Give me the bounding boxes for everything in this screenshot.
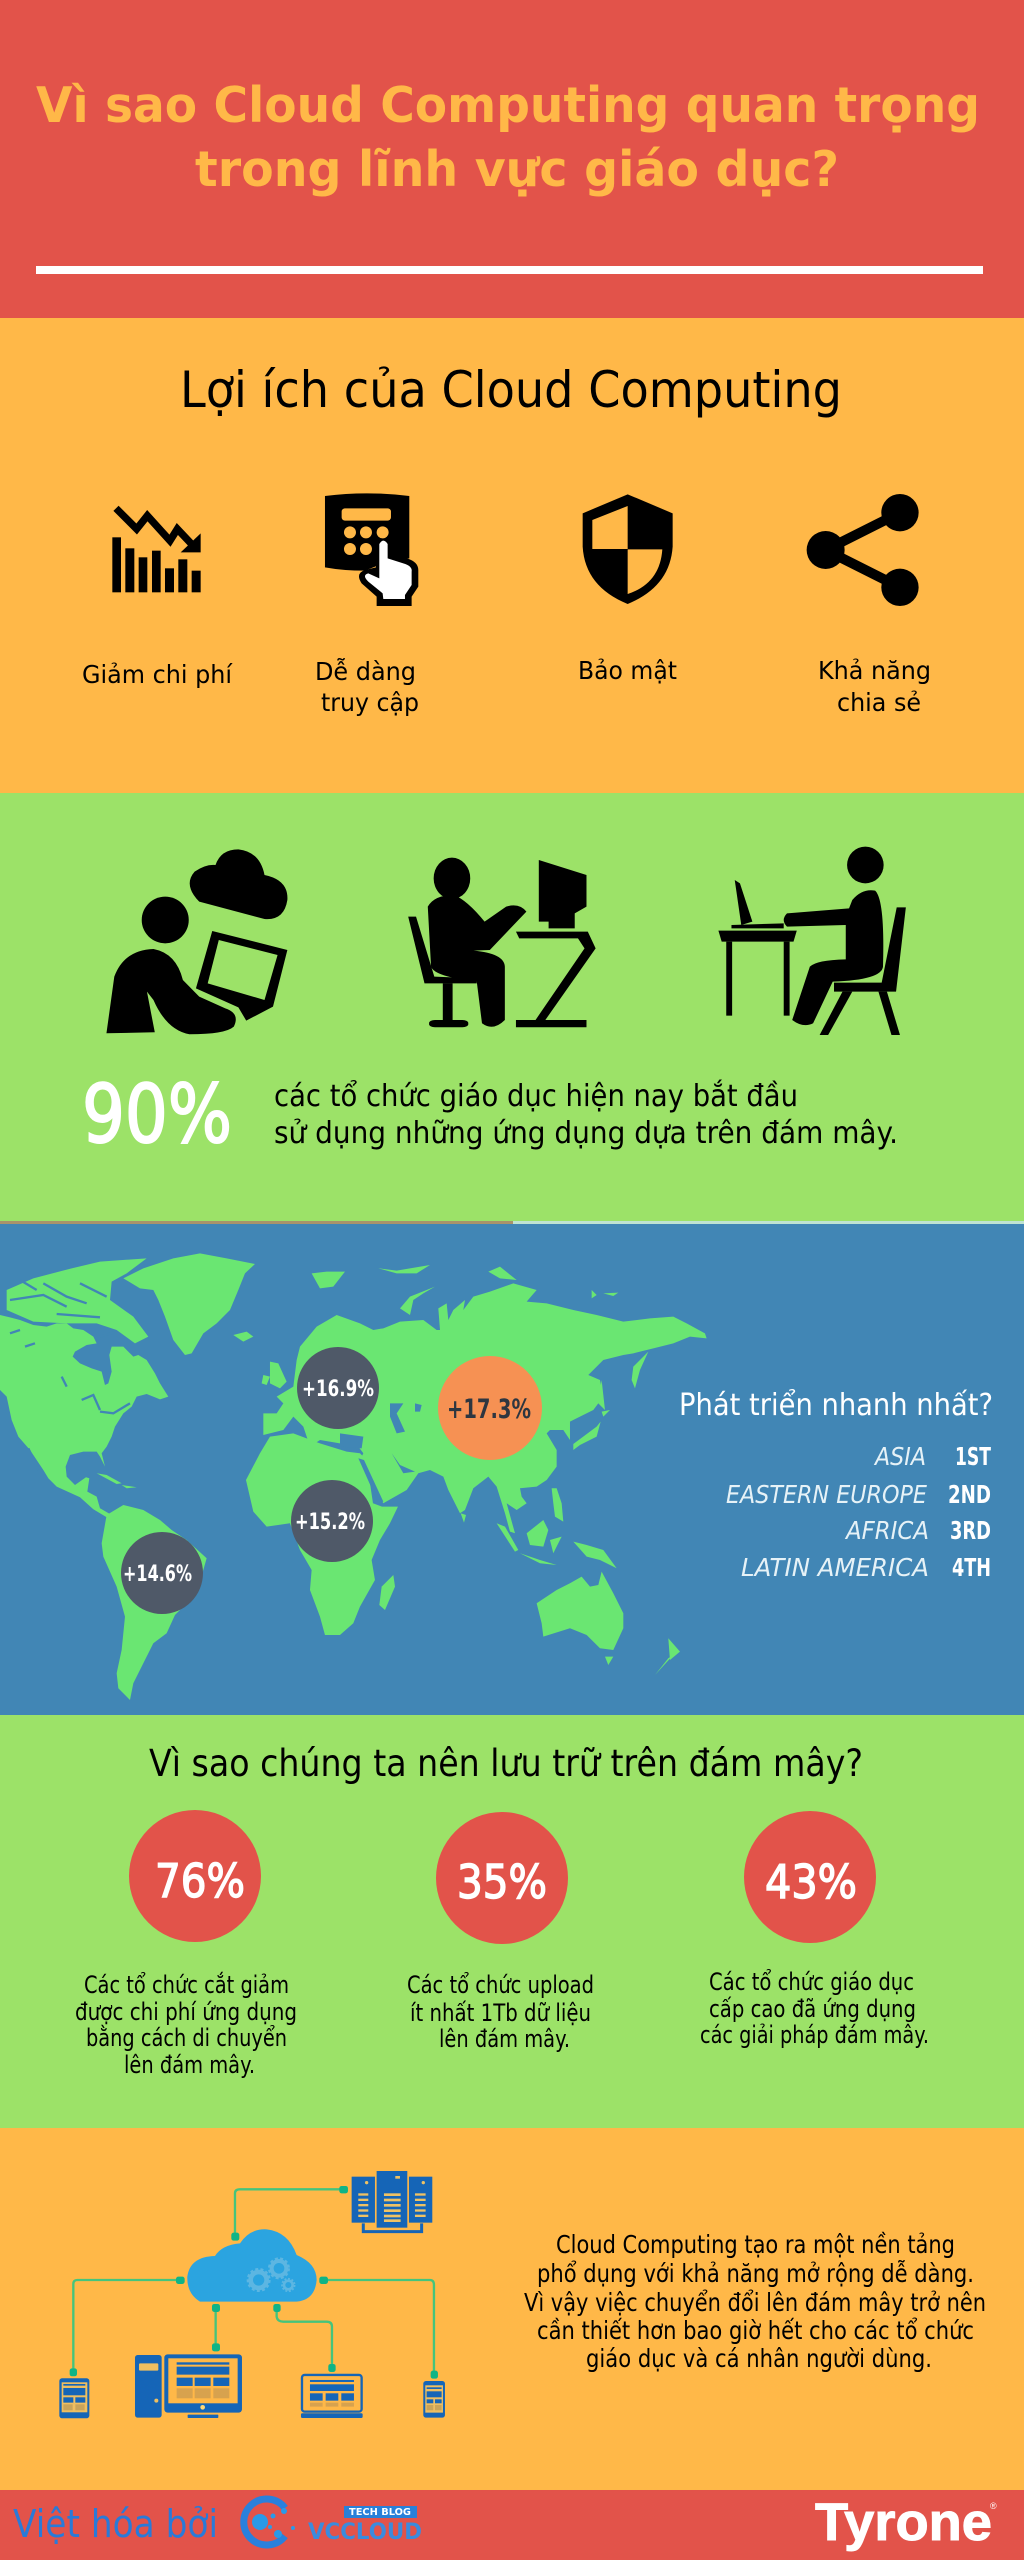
icon: share — [807, 494, 919, 606]
credit text: Việt hóa bởi — [13, 2502, 218, 2546]
stat: 76% — [129, 1810, 261, 1942]
ranking list: ASIA — [873, 1442, 926, 1471]
icon: cloud with gears — [187, 2229, 317, 2302]
icon: person with cloud and laptop — [106, 849, 287, 1034]
text: 43% description: Các tổ chức giáo dục — [709, 1968, 914, 1996]
label: access — [315, 657, 419, 717]
text: cloud platform description: giáo dục và cá nhân người dùng. — [586, 2344, 932, 2373]
logo: Tyrone: ® — [990, 2501, 997, 2511]
panel: benefits — [0, 318, 1024, 793]
marker: Europe +16.9% — [297, 1347, 379, 1429]
icon: keypad with hand — [325, 493, 418, 606]
icon: servers — [352, 2171, 432, 2232]
text: 43% description: các giải pháp đám mây. — [700, 2021, 929, 2049]
label: access: truy cập — [321, 688, 419, 717]
panel: cloud platform — [0, 2128, 1024, 2490]
label: access: Dễ dàng — [315, 657, 416, 686]
text: 35% description: ít nhất 1Tb dữ liệu — [410, 1999, 591, 2027]
stat: 76%: 76% — [155, 1854, 245, 1908]
text: 76% description: bằng cách di chuyển — [86, 2023, 287, 2052]
stat: 35% — [436, 1812, 568, 1944]
label: cost: Giảm chi phí — [82, 660, 233, 689]
ranking list — [726, 1442, 991, 1582]
ranking list: 4TH — [952, 1553, 991, 1582]
text: 76% description: được chi phí ứng dụng — [75, 1998, 297, 2026]
marker: Latin America +14.6% — [121, 1532, 203, 1614]
title — [36, 77, 980, 198]
text: 76% description: Các tổ chức cắt giảm — [84, 1970, 289, 1999]
icon: phone — [423, 2381, 445, 2418]
marker: Latin America +14.6%: +14.6% — [123, 1562, 192, 1587]
ranking list: 3RD — [950, 1516, 991, 1545]
ranking list: LATIN AMERICA — [741, 1553, 929, 1582]
label: sharing: chia sẻ — [837, 688, 921, 717]
panel: 90 percent — [0, 793, 1024, 1222]
ranking list: EASTERN EUROPE — [726, 1480, 927, 1509]
text: 35% description: Các tổ chức upload — [407, 1971, 594, 1999]
panel: why store in the cloud — [0, 1715, 1024, 2128]
text: 90 percent description — [274, 1078, 898, 1151]
chart: world map — [0, 1253, 707, 1700]
text: 90 percent description: sử dụng những ứng dụng dựa trên đám mây. — [274, 1116, 898, 1151]
connectors — [70, 2186, 438, 2379]
logo: VCCloud: TECH BLOG — [349, 2507, 411, 2518]
icon: desktop computer — [135, 2354, 242, 2418]
title: Vì sao Cloud Computing quan trọng — [36, 77, 980, 134]
panel: footer — [0, 2490, 1024, 2560]
logo: VCCloud — [244, 2499, 422, 2545]
heading: why store: Vì sao chúng ta nên lưu trữ trên đám mây? — [149, 1742, 863, 1785]
text: 43% description — [700, 1968, 929, 2049]
icon: laptop — [301, 2375, 363, 2418]
text: 35% description: lên đám mây. — [439, 2025, 570, 2053]
panel: world map — [0, 1221, 1024, 1715]
label: sharing — [818, 656, 931, 717]
panel: header — [0, 0, 1024, 318]
marker: Asia +17.3%: +17.3% — [447, 1394, 531, 1425]
icon: shield — [583, 494, 673, 604]
ranking list: AFRICA — [844, 1516, 929, 1545]
label: sharing: Khả năng — [818, 656, 931, 685]
logo: VCCloud: VCCLOUD — [308, 2520, 422, 2545]
stat: 35%: 35% — [457, 1855, 547, 1909]
text: cloud platform description: Cloud Computing tạo ra một nền tảng — [556, 2230, 955, 2259]
ranking list: 2ND — [948, 1480, 991, 1509]
stat: 90%: 90% — [82, 1068, 232, 1161]
title: trong lĩnh vực giáo dục? — [195, 141, 839, 198]
icon: person at laptop — [718, 847, 906, 1035]
stat: 43%: 43% — [765, 1855, 857, 1909]
logo: Tyrone: Tyrone — [815, 2493, 992, 2552]
icon: falling cost chart — [112, 508, 201, 592]
diagram: cloud network — [59, 2171, 445, 2418]
text: 43% description: cấp cao đã ứng dụng — [709, 1995, 916, 2023]
marker: Africa +15.2%: +15.2% — [295, 1510, 365, 1535]
text: 90 percent description: các tổ chức giáo dục hiện nay bắt đầu — [274, 1078, 798, 1114]
marker: Africa +15.2% — [291, 1480, 373, 1562]
icon: tablet — [59, 2378, 89, 2418]
heading: fastest growing: Phát triển nhanh nhất? — [679, 1387, 993, 1423]
text: 76% description — [75, 1970, 297, 2079]
marker: Europe +16.9%: +16.9% — [302, 1377, 374, 1402]
ranking list: 1ST — [955, 1442, 991, 1471]
heading: benefits: Lợi ích của Cloud Computing — [180, 361, 842, 419]
label: security: Bảo mật — [578, 656, 677, 685]
text: cloud platform description — [524, 2230, 986, 2373]
stat: 43% — [744, 1811, 876, 1943]
icon: person at desktop — [408, 858, 596, 1027]
text: 35% description — [407, 1971, 594, 2053]
marker: Asia +17.3% — [438, 1356, 542, 1460]
text: 76% description: lên đám mây. — [124, 2051, 255, 2079]
